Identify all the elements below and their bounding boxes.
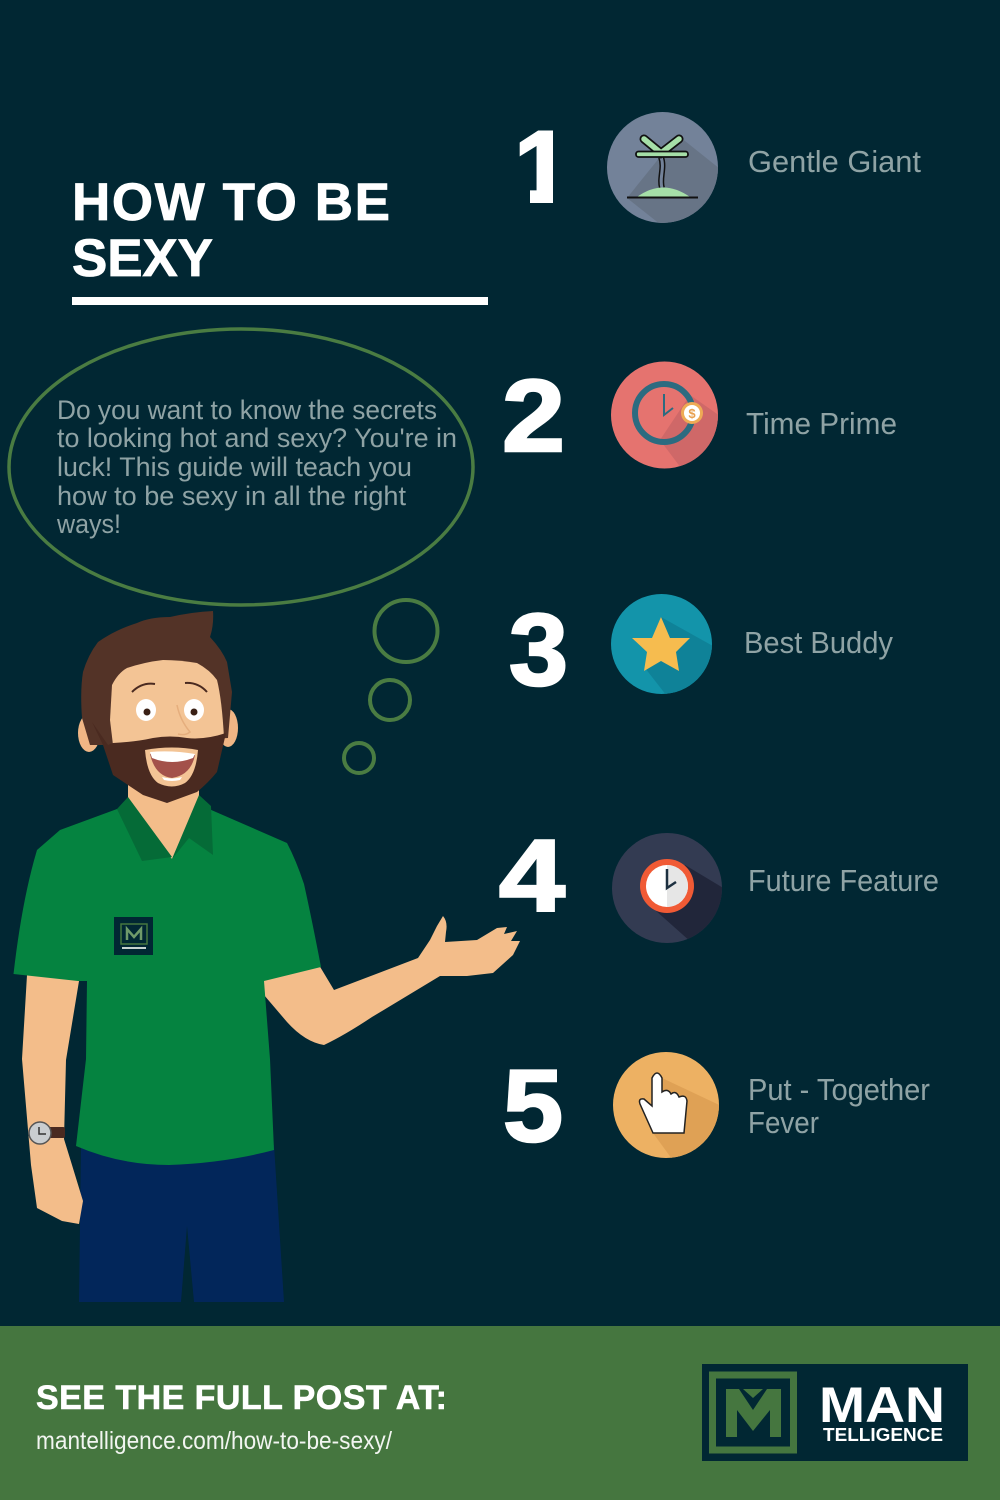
title [72, 173, 390, 288]
step 3 number: 3 [509, 593, 568, 707]
step 4 label: Future Feature [748, 863, 939, 898]
logo: MAN [819, 1377, 945, 1433]
step 5 number: 5 [503, 1049, 563, 1163]
step 5 label: Fever [748, 1105, 819, 1140]
ears [78, 709, 238, 752]
mouth [145, 748, 198, 786]
step 5 label: Put - Together [748, 1072, 930, 1107]
icon: clock with coin: $ [688, 406, 696, 421]
right arm and hand [262, 916, 520, 1045]
character: man in green polo [14, 611, 520, 1302]
step 1 label: Gentle Giant [748, 144, 921, 179]
thought bubble with intro text: ways! [56, 509, 121, 539]
face [110, 660, 224, 770]
icon: star [611, 594, 712, 694]
left arm and hand [22, 975, 83, 1224]
polo shirt [14, 800, 321, 1165]
step 3 label: Best Buddy [744, 625, 893, 660]
thought bubble with intro text [9, 329, 473, 605]
step 2 number: 2 [502, 359, 565, 473]
icon: wall clock [612, 833, 722, 943]
hair [81, 611, 232, 745]
thought bubble with intro text: luck! This guide will teach you [57, 452, 412, 482]
logo [702, 1364, 968, 1461]
thought bubble with intro text: Do you want to know the secrets [57, 395, 437, 425]
icon: palm island [607, 112, 718, 223]
collar [117, 795, 213, 861]
beard [92, 722, 226, 803]
pants [79, 1145, 284, 1302]
title underline [72, 297, 488, 305]
step 5 label [748, 1072, 930, 1140]
thought bubble with intro text: to looking hot and sexy? You're in [57, 423, 457, 453]
icon: pointing hand [613, 1052, 719, 1158]
eyes, brows and nose [132, 683, 207, 735]
icon: clock with coin [611, 362, 718, 468]
shirt logo badge [114, 917, 153, 955]
thought trail circles [344, 600, 438, 773]
step 1 number: 1 [514, 110, 571, 224]
title: SEXY [72, 229, 213, 288]
watch [29, 1122, 65, 1144]
title: HOW TO BE [72, 173, 390, 232]
neck [128, 780, 199, 859]
footer call to action: SEE THE FULL POST AT: [36, 1379, 447, 1417]
footer band [0, 1326, 1000, 1500]
logo: TELLIGENCE [823, 1425, 943, 1445]
step 2 label: Time Prime [746, 406, 897, 441]
thought bubble with intro text: how to be sexy in all the right [57, 481, 406, 511]
footer url: mantelligence.com/how-to-be-sexy/ [36, 1427, 392, 1455]
step 4 number: 4 [499, 819, 565, 933]
